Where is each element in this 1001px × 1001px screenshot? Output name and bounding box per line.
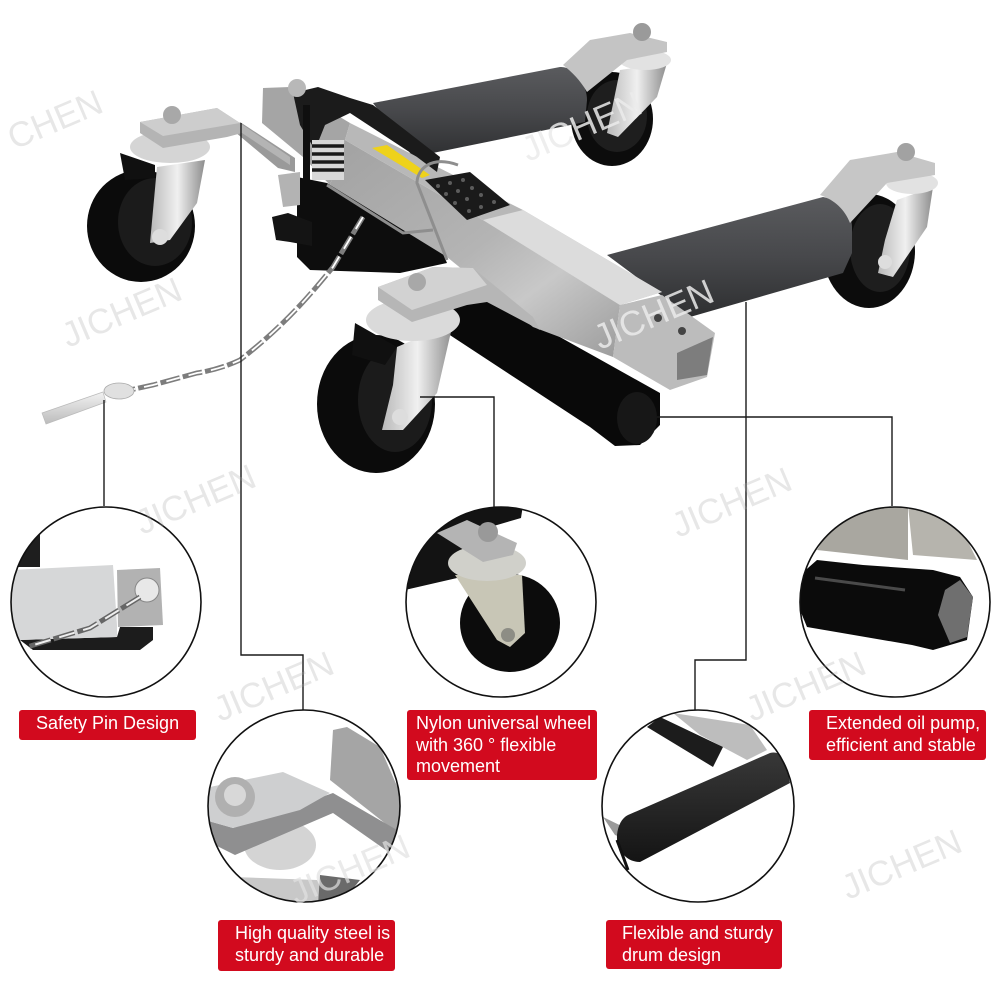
label: wheel: with 360 ° flexible <box>416 734 556 754</box>
watermarks: JICHEN <box>284 827 415 912</box>
label: drum: Flexible and sturdy <box>622 923 773 943</box>
silver arm behind spring <box>235 122 295 172</box>
black jack body <box>272 172 447 273</box>
detail circle: safety pin <box>0 507 201 697</box>
label: steel: High quality steel is <box>235 923 390 943</box>
detail circle: oil pump <box>800 505 990 697</box>
label: oil pump: efficient and stable <box>826 734 976 754</box>
handle lever and spring <box>288 79 440 180</box>
watermarks: JICHEN <box>836 822 967 907</box>
right plate <box>820 143 935 223</box>
yellow warning label <box>372 145 430 178</box>
upper plate <box>563 23 667 92</box>
silver beam <box>262 87 715 390</box>
chain and safety pin <box>42 217 363 424</box>
label: safety pin <box>19 710 196 740</box>
detail circle: wheel <box>405 505 596 697</box>
upper gray tube <box>373 67 587 157</box>
front caster <box>317 267 540 473</box>
watermarks: JICHEN <box>588 272 719 357</box>
label: wheel: Nylon universal wheel <box>416 713 591 733</box>
label: steel <box>218 920 395 971</box>
watermarks <box>2 83 967 912</box>
hydraulic cylinder <box>430 270 660 446</box>
watermarks: CHEN <box>2 83 108 157</box>
product: dolly jack <box>42 23 938 473</box>
retaining wire and hook <box>327 162 458 260</box>
watermarks: JICHEN <box>208 644 339 729</box>
label: wheel <box>407 710 597 780</box>
label: safety pin: Safety Pin Design <box>36 713 179 733</box>
label: steel: sturdy and durable <box>235 944 384 964</box>
watermarks: JICHEN <box>130 457 261 542</box>
leader lines <box>104 123 892 711</box>
upper rear caster wheel <box>571 50 671 166</box>
right caster wheel <box>823 172 938 308</box>
lower gray tube <box>607 197 852 317</box>
label: drum: drum design <box>622 944 721 964</box>
watermarks: JICHEN <box>740 644 871 729</box>
label: oil pump <box>809 710 986 760</box>
label: drum <box>606 920 782 969</box>
label: wheel: movement <box>416 756 500 776</box>
watermarks: JICHEN <box>666 460 797 545</box>
watermarks: JICHEN <box>56 270 187 355</box>
foot pad <box>425 172 510 220</box>
detail circle: drum <box>602 710 794 902</box>
detail circle: steel <box>205 710 400 905</box>
watermarks: JICHEN <box>516 84 647 169</box>
label: oil pump: Extended oil pump, <box>826 713 980 733</box>
left caster <box>87 106 290 282</box>
